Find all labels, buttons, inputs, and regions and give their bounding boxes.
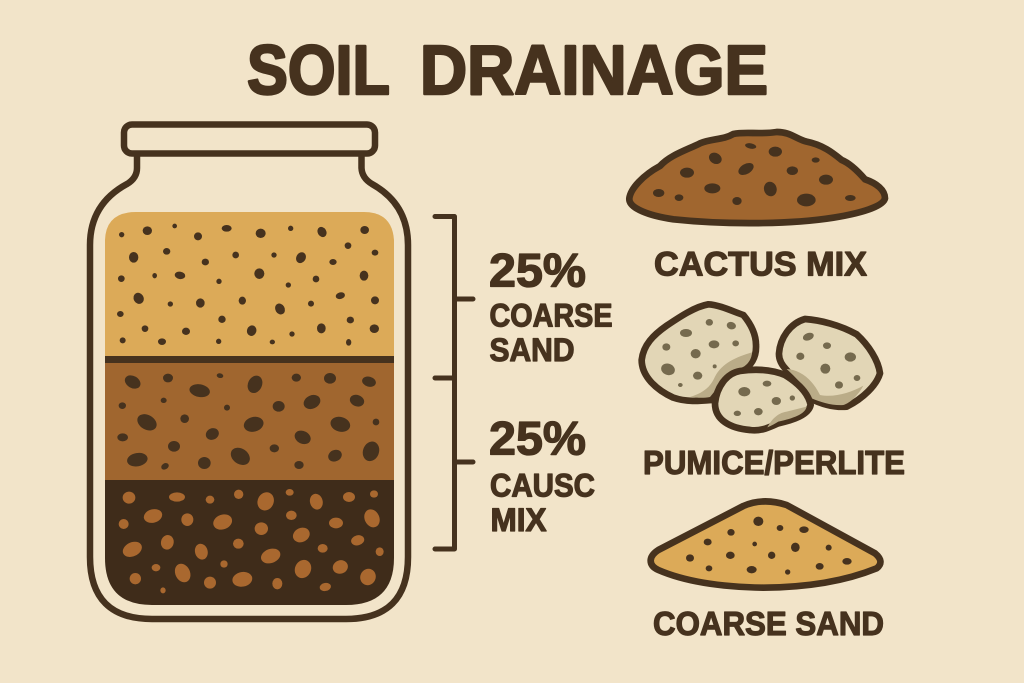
label line one: COARSE <box>490 298 612 334</box>
label line two: SAND <box>490 332 574 368</box>
title: DRAINAGE <box>420 31 768 109</box>
cactus mix particles <box>117 373 382 471</box>
label: pumice/perlite: PUMICE/PERLITE <box>643 444 905 481</box>
sand particles <box>117 224 379 346</box>
title: SOIL <box>247 31 390 109</box>
layer: dark base <box>100 480 400 610</box>
label: cactus mix: CACTUS MIX <box>654 246 867 284</box>
label line two: MIX <box>490 502 547 538</box>
rock: left <box>642 304 756 401</box>
layer: cactus mix <box>100 363 400 480</box>
jar lid <box>124 124 375 154</box>
icon: coarse sand pile <box>651 501 880 588</box>
layer: divider band <box>100 356 400 363</box>
bracket markers <box>435 216 473 549</box>
percentage: 25% <box>489 244 586 296</box>
label: 25% coarse sand <box>489 244 612 368</box>
label: 25% mix <box>489 412 595 538</box>
label line one: CAUSC <box>490 468 595 504</box>
title <box>247 31 768 109</box>
rock: front <box>715 370 811 430</box>
icon: cactus mix mound <box>629 132 885 223</box>
layer: coarse sand <box>100 205 400 356</box>
percentage: 25% <box>489 412 586 464</box>
label: coarse sand: COARSE SAND <box>653 605 884 642</box>
icon: pumice and perlite rocks <box>642 304 880 430</box>
rock: right <box>779 319 880 407</box>
jar with soil layers <box>90 124 408 619</box>
soil layers <box>100 205 400 610</box>
dark layer particles <box>119 489 384 593</box>
jar glass outline <box>90 154 408 619</box>
